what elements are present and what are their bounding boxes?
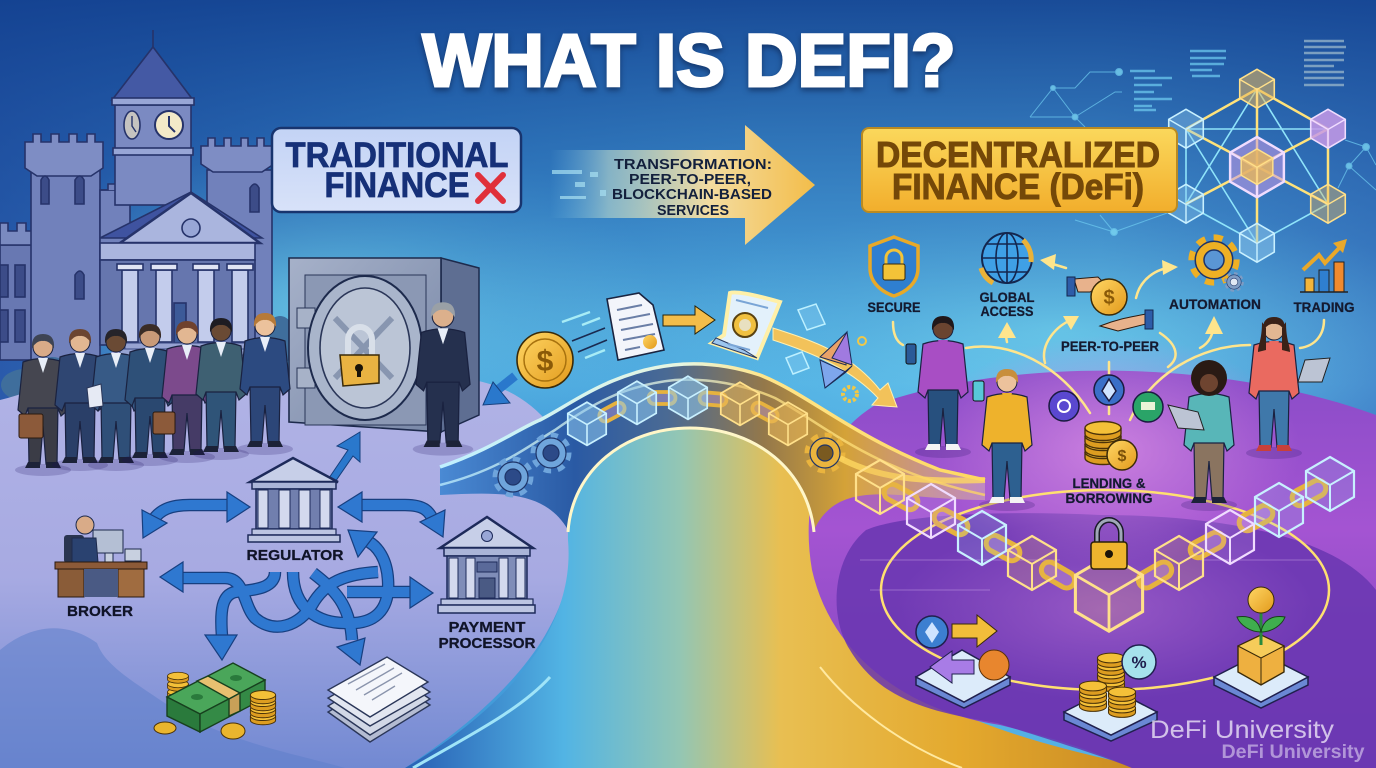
lending and borrowing label xyxy=(1066,476,1152,506)
bank steps xyxy=(115,343,265,361)
lending coin stack xyxy=(1085,422,1137,470)
payment processor bank xyxy=(438,517,536,652)
purple glow xyxy=(895,335,1315,700)
gold coins right xyxy=(154,690,276,739)
icon: red cross xyxy=(478,175,503,201)
DeFi blockchain cubes xyxy=(856,457,1354,631)
label: payment processor: PAYMENT xyxy=(448,619,526,636)
arrow to smart contract xyxy=(663,306,715,334)
transformation arrow: TRANSFORMATION: xyxy=(614,157,772,173)
label: global access: GLOBAL xyxy=(980,290,1034,305)
icon: global access xyxy=(980,233,1034,319)
lower left wave xyxy=(0,628,345,768)
network graph background, top right xyxy=(1030,41,1376,236)
platform: yield coins: % xyxy=(1131,653,1147,672)
user: purple shirt with phone xyxy=(915,316,971,458)
transformation arrow xyxy=(550,125,815,245)
watermark xyxy=(1150,716,1365,763)
traditional finance label xyxy=(272,128,521,212)
regulator bank xyxy=(246,458,344,564)
lending and borrowing label: BORROWING xyxy=(1066,491,1152,506)
label: secure: SECURE xyxy=(868,300,920,315)
lending coin stack: $ xyxy=(1118,448,1127,465)
platform: growth box xyxy=(1214,587,1308,708)
transformation arrow: PEER-TO-PEER, xyxy=(629,172,751,188)
gold arrow to DeFi xyxy=(773,328,897,407)
bank vault xyxy=(289,258,479,432)
icon: trading chart xyxy=(1294,239,1354,315)
icon: central padlock xyxy=(1091,520,1127,569)
watermark: DeFi University xyxy=(1222,742,1365,763)
small gold gears xyxy=(843,337,866,401)
castle xyxy=(0,30,274,368)
chain links xyxy=(881,477,1329,591)
label: broker: BROKER xyxy=(67,603,133,620)
label: regulator: REGULATOR xyxy=(246,547,344,564)
decentralized finance label xyxy=(862,128,1177,212)
watermark: DeFi University xyxy=(1150,716,1335,744)
lower dark purple platform xyxy=(837,513,1376,768)
traditional finance label: FINANCE xyxy=(324,166,470,205)
label: peer-to-peer: PEER-TO-PEER xyxy=(1061,339,1159,354)
glowing curves on purple land xyxy=(840,458,1329,690)
broker desk xyxy=(55,516,147,620)
icon: global access: ACCESS xyxy=(980,304,1034,319)
afro hair xyxy=(1191,360,1227,396)
right purple land xyxy=(809,371,1376,768)
banker by vault xyxy=(413,302,473,456)
user: yellow sweater with phone xyxy=(979,369,1035,511)
river xyxy=(405,428,1150,768)
flowing gold connector lines xyxy=(893,262,1324,420)
title: WHAT IS DEFI? xyxy=(422,19,956,102)
traditional finance label: TRADITIONAL xyxy=(286,136,508,175)
blockchain band xyxy=(440,364,985,532)
blockchain cubes xyxy=(568,376,807,445)
lending and borrowing label: LENDING & xyxy=(1072,476,1146,491)
contract document xyxy=(607,293,664,360)
smart contract scroll xyxy=(712,292,780,358)
payment processor bank: PROCESSOR xyxy=(438,635,536,652)
platform: swap xyxy=(916,615,1010,708)
gold coins behind cash xyxy=(168,672,188,699)
chain links on the band xyxy=(597,392,780,424)
queue of customers xyxy=(15,313,293,476)
bushes xyxy=(1,316,296,401)
arrow to vault xyxy=(329,432,360,482)
blue arrowheads xyxy=(142,492,445,665)
icon: peer-to-peer hands and coin: $ xyxy=(1103,287,1115,309)
long hair of coral user xyxy=(1258,322,1290,352)
gears xyxy=(497,437,841,493)
ethereum diamond xyxy=(820,332,852,388)
gold connector arrowheads xyxy=(998,254,1223,338)
user: coral top with laptop xyxy=(1246,317,1302,459)
icon: automation gear xyxy=(1169,240,1261,312)
tangled blue arrows xyxy=(153,505,434,640)
face of teal user xyxy=(1200,374,1218,392)
paper stack xyxy=(328,657,430,742)
small documents xyxy=(786,304,825,374)
left ground xyxy=(0,345,571,768)
coin with arrow: $ xyxy=(537,345,554,378)
label: automation: AUTOMATION xyxy=(1169,297,1261,312)
laptops and phones xyxy=(906,344,1330,430)
cash stack xyxy=(167,663,265,732)
user: teal top with laptop xyxy=(1181,369,1237,511)
coin with arrow xyxy=(483,312,607,405)
transformation arrow: BLOCKCHAIN-BASED xyxy=(612,187,772,203)
icon: secure shield xyxy=(868,237,920,315)
decentralized finance label: DECENTRALIZED xyxy=(876,134,1160,175)
river edge highlights xyxy=(413,667,962,768)
platform: yield coins xyxy=(1064,645,1157,741)
transformation arrow: SERVICES xyxy=(657,203,729,219)
icon: peer-to-peer hands and coin xyxy=(1061,277,1159,354)
token icons xyxy=(1049,375,1163,422)
label: trading: TRADING xyxy=(1294,300,1354,315)
decentralized finance label: FINANCE (DeFi) xyxy=(892,166,1144,207)
blockchain network cube graphic xyxy=(1169,69,1345,262)
